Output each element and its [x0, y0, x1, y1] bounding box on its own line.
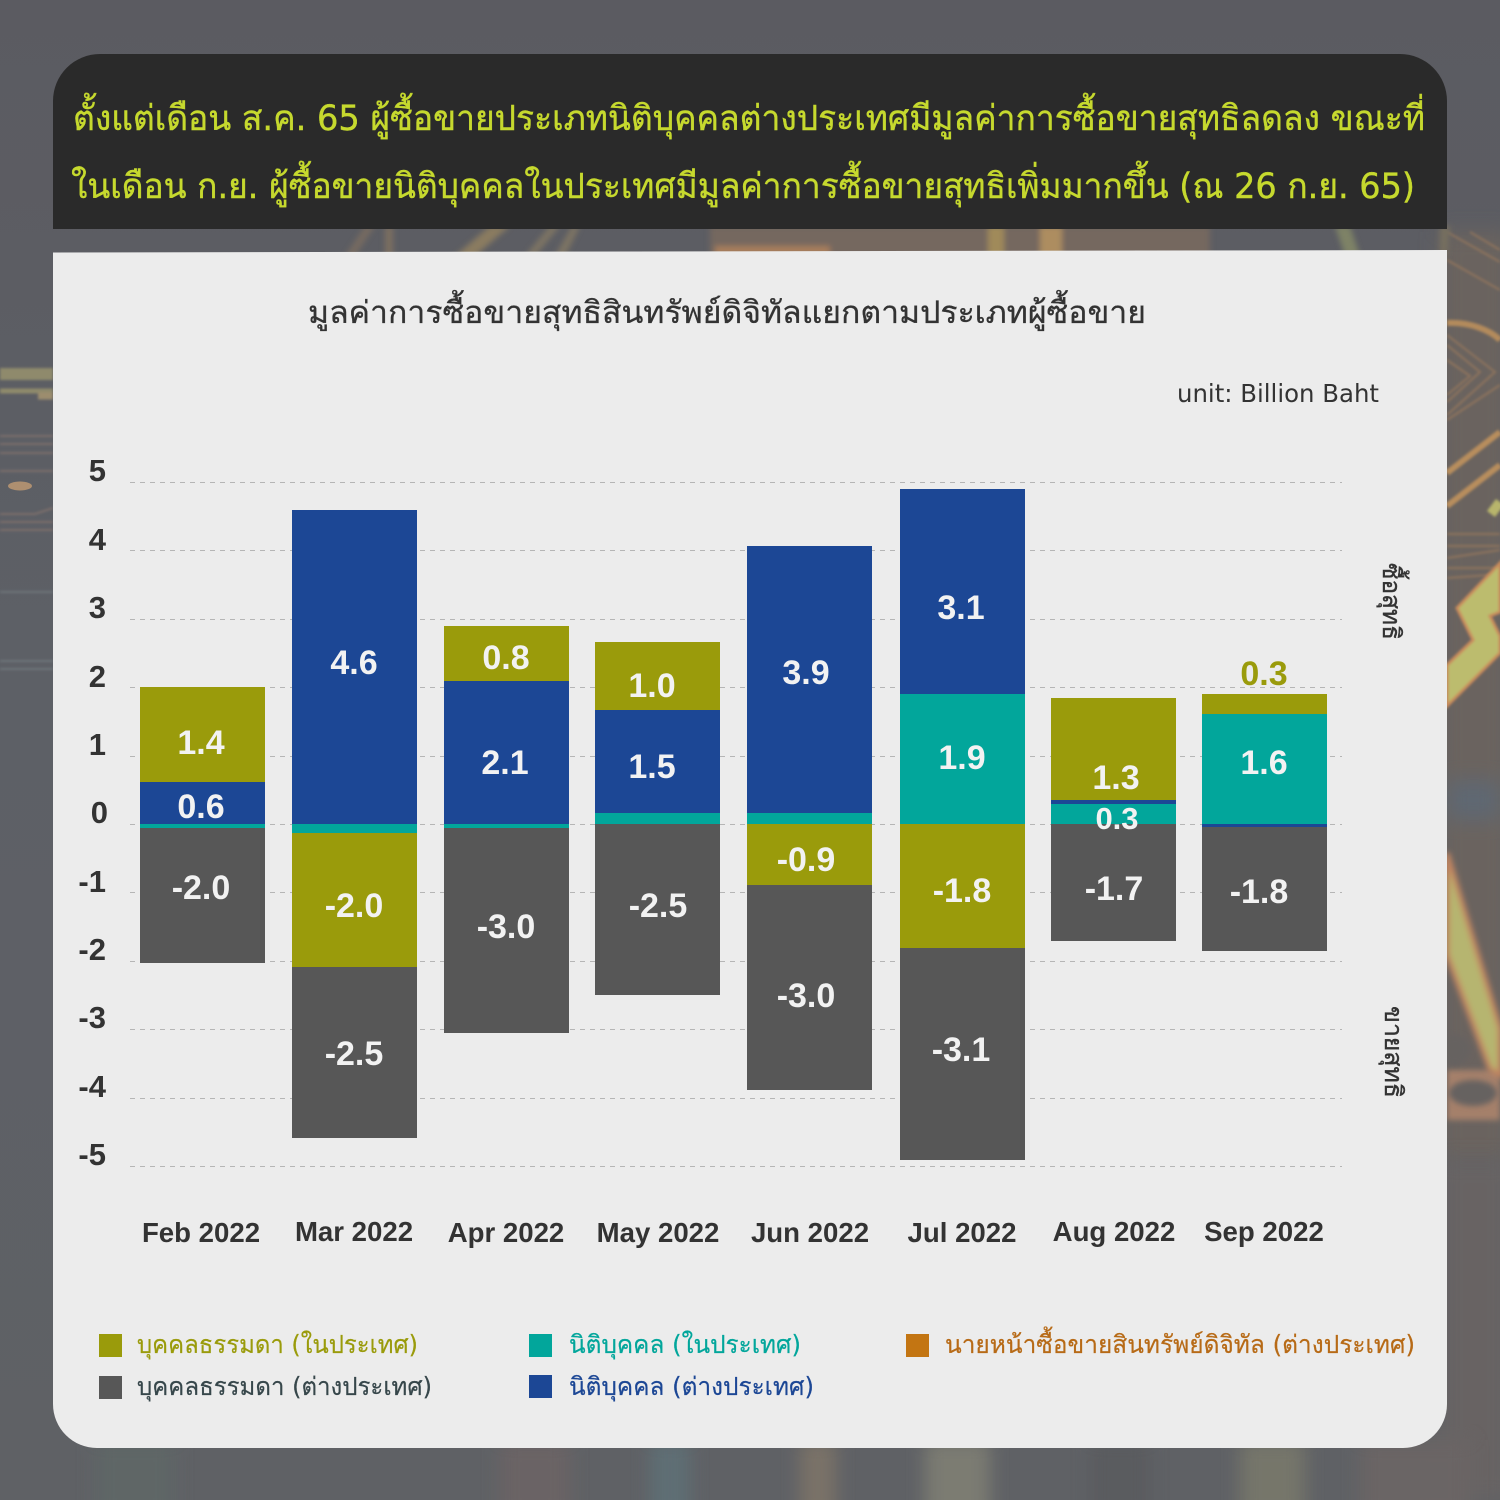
value labels: -2.5: [325, 1035, 383, 1073]
value labels: -2.0: [325, 887, 383, 925]
value labels: -3.0: [777, 977, 835, 1015]
legend: foreign individual: บุคคลธรรมดา (ต่างประเทศ): [137, 1372, 432, 1402]
y axis labels: -2: [78, 932, 106, 967]
bar: Jul 2022: [900, 489, 1025, 1160]
value labels: -1.7: [1085, 870, 1143, 908]
value labels: 0.3: [1095, 801, 1139, 836]
value labels: -3.1: [932, 1031, 990, 1069]
value labels: 3.1: [937, 589, 985, 627]
value labels: 2.1: [481, 744, 529, 782]
y axis labels: -1: [78, 864, 106, 899]
legend: domestic individual: บุคคลธรรมดา (ในประเทศ): [137, 1330, 418, 1360]
x axis labels: Mar 2022: [295, 1216, 413, 1247]
side label: net buy: ซื้อสุทธิ: [1376, 563, 1410, 640]
value labels: 1.4: [177, 724, 225, 762]
bar: Mar 2022: [292, 510, 417, 1138]
side label: net sell: ขายสุทธิ: [1378, 1006, 1408, 1098]
bar: Jun 2022: [747, 546, 872, 1090]
value labels: 1.6: [1240, 744, 1288, 782]
value labels: 4.6: [330, 644, 378, 682]
left strip disc: [8, 482, 32, 490]
bar: Feb 2022: [140, 687, 265, 963]
left strip traces: [0, 374, 53, 669]
value labels: -3.0: [477, 908, 535, 946]
value labels: -2.0: [172, 869, 230, 907]
y axis labels: -5: [78, 1137, 106, 1172]
value labels: -2.5: [629, 887, 687, 925]
x axis labels: [142, 1216, 1324, 1248]
x axis labels: Sep 2022: [1204, 1216, 1324, 1247]
y axis labels: 0: [91, 795, 108, 830]
value labels: [172, 589, 1288, 1073]
bar: Aug 2022: [1051, 698, 1176, 941]
right strip thin traces: [1447, 232, 1500, 578]
right strip lower glow: [1447, 1070, 1500, 1120]
chart panel: [53, 250, 1447, 1448]
value labels: -0.9: [777, 841, 835, 879]
x axis labels: Jul 2022: [908, 1217, 1016, 1248]
y axis labels: -4: [78, 1069, 107, 1104]
value labels: 0.6: [177, 788, 225, 826]
x axis labels: Jun 2022: [751, 1217, 869, 1248]
legend: foreign digital asset broker: นายหน้าซื้อขายสินทรัพย์ดิจิทัล (ต่างประเทศ): [945, 1326, 1415, 1359]
y axis labels: [78, 453, 108, 1172]
legend: foreign juristic: นิติบุคคล (ต่างประเทศ): [569, 1372, 814, 1402]
legend: [99, 1326, 1415, 1402]
unit label: unit: Billion Baht: [1177, 379, 1379, 408]
right strip tint: [1440, 232, 1500, 1162]
bar: Sep 2022: [1202, 694, 1327, 951]
y axis labels: 5: [89, 453, 106, 488]
y axis labels: 1: [89, 727, 106, 762]
value labels: 0.3: [1240, 655, 1288, 693]
bar: May 2022: [595, 642, 720, 995]
value labels: 1.3: [1092, 759, 1140, 797]
header line 1: ตั้งแต่เดือน ส.ค. 65 ผู้ซื้อขายประเภทนิติบุคคลต่างประเทศมีมูลค่าการซื้อขายสุทธิลดลง ขณะที่: [73, 92, 1425, 139]
value labels: 1.0: [628, 667, 676, 705]
value labels: -1.8: [933, 872, 991, 910]
bottom strip glows: [95, 1440, 1470, 1500]
value labels: 3.9: [782, 654, 830, 692]
x axis labels: Aug 2022: [1053, 1216, 1175, 1247]
value labels: 1.5: [628, 748, 676, 786]
y axis labels: 3: [89, 590, 106, 625]
y axis labels: 2: [89, 659, 106, 694]
gap strip between banner and panel: [345, 226, 1450, 256]
x axis labels: Feb 2022: [142, 1217, 260, 1248]
chart title: มูลค่าการซื้อขายสุทธิสินทรัพย์ดิจิทัลแยกตามประเภทผู้ซื้อขาย: [308, 290, 1146, 332]
value labels: 1.9: [938, 739, 986, 777]
header line 2: ในเดือน ก.ย. ผู้ซื้อขายนิติบุคคลในประเทศมีมูลค่าการซื้อขายสุทธิเพิ่มมากขึ้น (ณ 26 ก.ย. 65): [71, 160, 1415, 207]
value labels: 0.8: [482, 639, 530, 677]
y axis labels: -3: [78, 1000, 106, 1035]
bar: Apr 2022: [444, 626, 569, 1033]
x axis labels: May 2022: [597, 1217, 719, 1248]
right strip bands: [1447, 323, 1500, 514]
y axis labels: 4: [89, 522, 107, 557]
value labels: -1.8: [1230, 873, 1288, 911]
x axis labels: Apr 2022: [448, 1217, 564, 1248]
gridlines: [130, 482, 1342, 1166]
stacked bar chart: [78, 453, 1410, 1248]
header banner: [53, 54, 1447, 229]
legend: domestic juristic: นิติบุคคล (ในประเทศ): [569, 1330, 801, 1360]
right strip bright chevron: [1447, 563, 1500, 706]
